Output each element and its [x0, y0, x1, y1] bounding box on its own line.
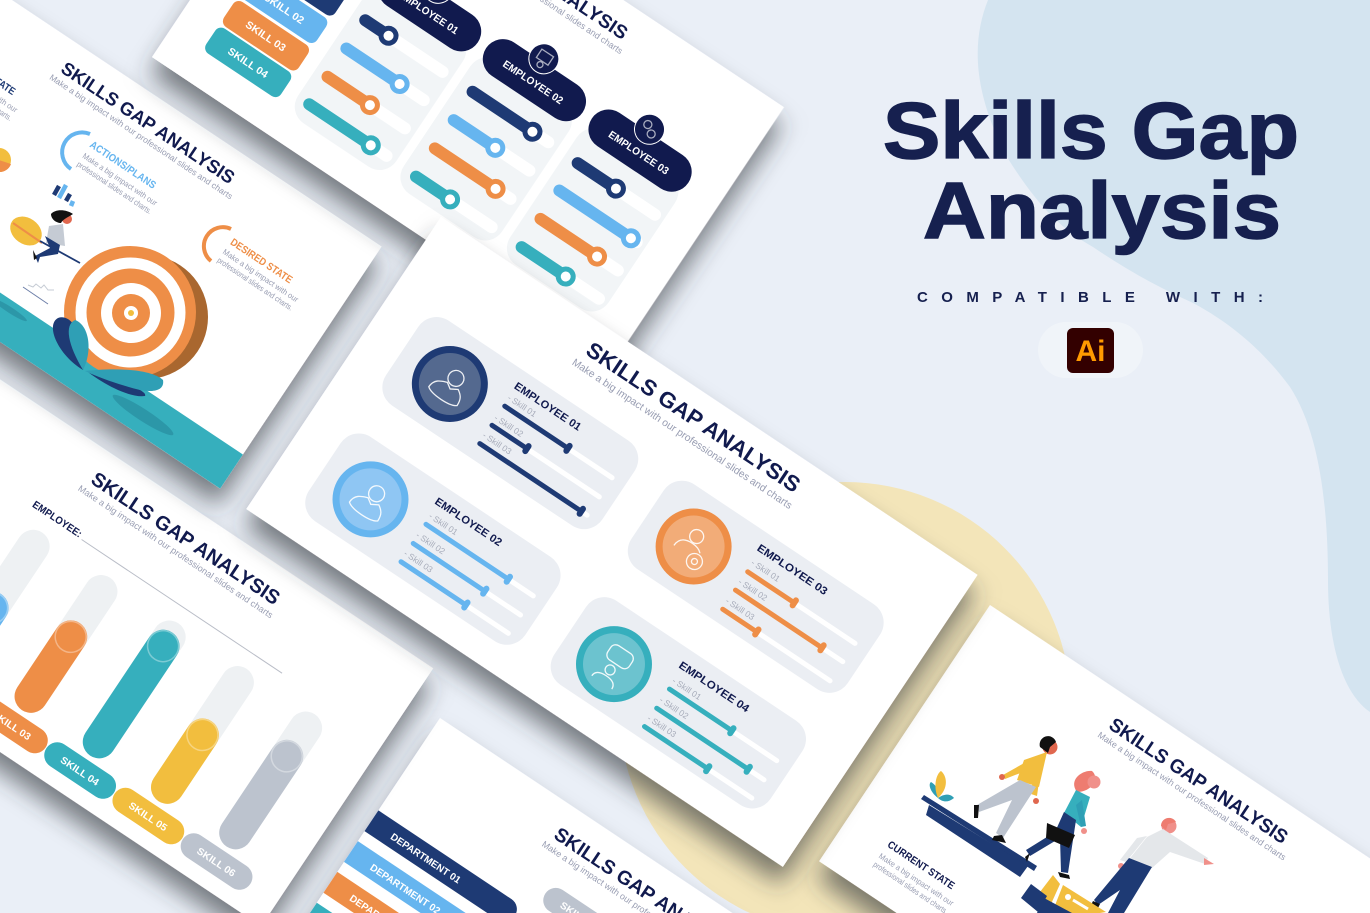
desired state text: professional slides and charts.	[215, 256, 295, 313]
department 01 bar: DEPARTMENT 01	[388, 832, 463, 887]
header pill: employee 02: EMPLOYEE 02	[500, 58, 565, 107]
panel: employee 04	[542, 589, 815, 817]
current state text: Make a big impact with our	[877, 852, 956, 908]
slide title: SKILLS GAP ANALYSIS	[87, 468, 284, 610]
department 03 bar	[323, 872, 480, 913]
icon: Adobe Illustrator badge	[1038, 322, 1143, 378]
tag: skill 03	[0, 692, 53, 758]
skill bars: employee 04: - Skill 03	[646, 713, 678, 739]
skill bars: employee 03: - Skill 01	[749, 557, 782, 584]
bar: skill 06	[176, 692, 348, 895]
tag: skill 04: SKILL 04	[225, 45, 270, 81]
slide title: SKILLS GAP ANALYSIS	[1105, 714, 1292, 849]
actions/plans text: Make a big impact with our	[81, 151, 159, 208]
pie icon	[0, 148, 11, 172]
skill bars: employee 03: - Skill 03	[724, 596, 757, 622]
icon: presenter	[532, 49, 554, 71]
tag: skill 06	[176, 828, 257, 895]
heading: employee 03: EMPLOYEE 03	[755, 542, 830, 598]
illustration: woman with briefcase	[1025, 771, 1100, 879]
squiggle line icon	[23, 284, 54, 304]
desired state text: DESIRED STATE	[228, 236, 295, 286]
target	[64, 246, 208, 379]
employee label and rule	[30, 499, 287, 676]
illustration: man pointing	[1091, 818, 1214, 913]
tag: skill 01	[257, 0, 348, 18]
tag: skill 03: SKILL 03	[243, 19, 288, 54]
teal floor band	[0, 168, 243, 489]
slide title: SKILLS GAP ANALYSIS	[57, 57, 239, 188]
slide: employees overview	[246, 217, 978, 867]
bar: skill 04	[39, 601, 212, 804]
skill bars: employee 01: - Skill 02	[493, 413, 525, 439]
illustration: boxes	[1021, 875, 1106, 913]
tag: skill 05: SKILL 05	[126, 801, 169, 834]
current state text: CURRENT STATE	[885, 839, 957, 892]
skill bars: employee 04	[639, 676, 785, 803]
illustration: woman on dart	[5, 210, 80, 263]
slide subtitle: Make a big impact with our professional slides and charts	[570, 357, 794, 512]
skill bars: employee 03	[718, 557, 864, 686]
avatar: employee 03	[641, 494, 746, 599]
illustration: man walking	[974, 736, 1058, 843]
main title: Skills Gap	[883, 86, 1299, 175]
slide subtitle: Make a big impact with our professional slides and charts	[48, 72, 235, 201]
tag: skill 03	[220, 0, 312, 73]
skill bars: employee 03: - Skill 02	[737, 576, 769, 603]
header pill: employee 03: EMPLOYEE 03	[606, 129, 671, 178]
arc: actions	[62, 132, 90, 169]
actions/plans text: ACTIONS/PLANS	[87, 139, 158, 192]
panel: employee 01	[374, 309, 647, 538]
skill bars: employee 04: - Skill 01	[671, 676, 703, 702]
floor shadow small	[0, 297, 28, 323]
slide: departments	[268, 718, 914, 913]
tag: skill 04: SKILL 04	[58, 755, 101, 789]
main title	[883, 86, 1299, 255]
compatible with label: COMPATIBLE WITH:	[917, 289, 1263, 306]
skill bars: employee 01: - Skill 01	[506, 393, 539, 419]
arc: desired state	[204, 227, 231, 261]
slide subtitle: Make a big impact with our professional slides and charts	[1096, 730, 1288, 863]
heading: employee 02: EMPLOYEE 02	[432, 496, 504, 549]
panel: employee 02	[297, 425, 569, 653]
column: employee 03	[499, 86, 709, 319]
skill bars: employee 01	[475, 393, 620, 520]
illustration: platform and plant	[921, 771, 1037, 877]
bar: skill 02	[0, 523, 56, 674]
skill bars: employee 02: - Skill 03	[402, 548, 435, 575]
header pill: employee 02	[475, 16, 604, 129]
tag: skill 06: SKILL 06	[194, 846, 237, 880]
avatar: employee 01	[397, 331, 503, 437]
tag: skill 02	[238, 0, 330, 46]
slide: current state illustration	[819, 605, 1370, 913]
header pill: employee 03	[581, 87, 709, 199]
column: employee 02	[393, 15, 604, 249]
background circle: beige	[619, 482, 1071, 913]
mini bar chart icon	[54, 185, 73, 206]
column: employee 01	[287, 0, 499, 179]
leaves	[53, 317, 163, 396]
heading: employee 01: EMPLOYEE 01	[512, 380, 583, 434]
avatar: employee 04	[561, 611, 667, 717]
employee label and rule: EMPLOYEE:	[30, 499, 84, 540]
skill bars: employee 02: - Skill 02	[414, 530, 447, 556]
heading: employee 04: EMPLOYEE 04	[676, 660, 752, 716]
slide: employee skill columns	[152, 0, 784, 364]
skill bars: employee 04: - Skill 02	[658, 695, 691, 721]
skill bars: employee 02	[396, 511, 542, 638]
skill pill	[538, 883, 621, 913]
skill bars: employee 02: - Skill 01	[427, 511, 460, 537]
tag: skill 04	[202, 25, 294, 100]
slide title: SKILLS GAP ANALYSIS	[582, 337, 805, 497]
slide: skill bars	[0, 352, 433, 913]
desired state text: Make a big impact with our	[221, 247, 300, 304]
avatar: employee 02	[318, 447, 423, 552]
floor shadow	[110, 390, 176, 440]
tag: skill 04	[39, 737, 121, 804]
slide subtitle: Make a big impact with our professional slides and charts	[76, 483, 275, 621]
bar: skill 05	[107, 646, 280, 849]
department 02 bar	[344, 841, 501, 913]
department 04 bar	[303, 903, 460, 913]
icon: Adobe Illustrator badge: Ai	[1076, 335, 1106, 368]
header pill: employee 01	[370, 0, 499, 59]
bar: skill 03	[0, 555, 144, 758]
slide: target	[0, 0, 382, 489]
skill bars: employee 01: - Skill 03	[481, 430, 514, 457]
icon: gears	[639, 119, 660, 140]
skill legend tags	[202, 0, 348, 100]
tag: skill 05	[107, 783, 189, 849]
actions/plans text: professional slides and charts.	[75, 160, 153, 216]
background blob: pale blue	[978, 0, 1370, 712]
department 01 bar	[365, 810, 522, 913]
panel: employee 03	[619, 472, 892, 701]
main title: Analysis	[923, 166, 1281, 255]
